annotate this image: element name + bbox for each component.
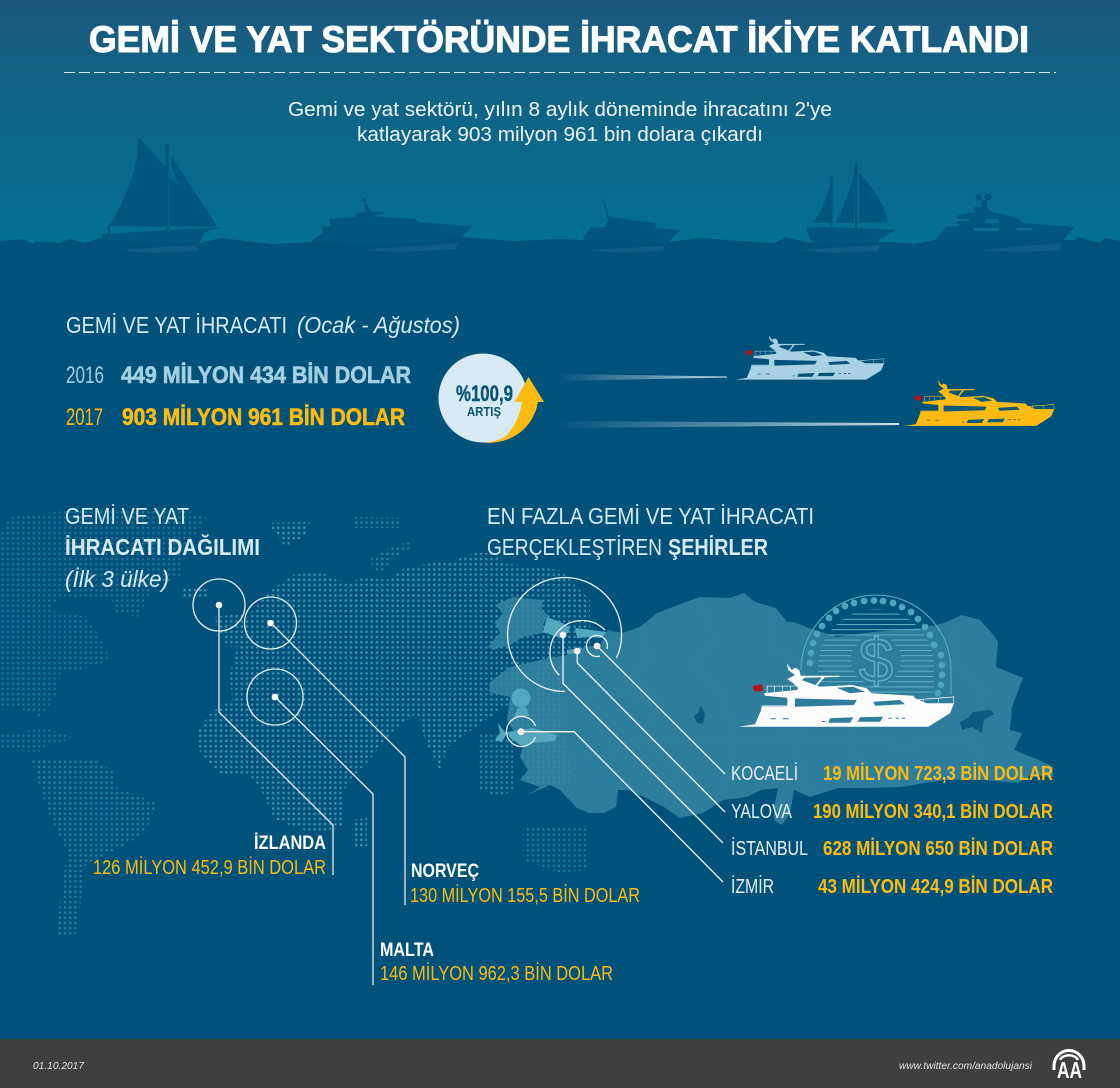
Anatolia (489, 593, 1053, 825)
yacht 2016 (light blue) (735, 335, 884, 380)
Kocaeli: KOCAELİ (731, 762, 798, 785)
dotted overlay on western Turkey (490, 600, 574, 793)
city values list (731, 762, 1053, 898)
2016 value: 2016 (66, 362, 104, 389)
İzmir (731, 875, 1053, 898)
growth badge with arrow (438, 354, 544, 443)
map of Turkey (485, 593, 1053, 825)
label: Norveç: 130 MİLYON 155,5 BİN DOLAR (410, 884, 640, 907)
label: Malta: 146 MİLYON 962,3 BİN DOLAR (380, 962, 613, 985)
speed trail 2017 (559, 421, 899, 428)
2017 value: 903 MİLYON 961 BİN DOLAR (122, 404, 405, 431)
map markers and leader lines: countries (193, 579, 405, 985)
İstanbul: 628 MİLYON 650 BİN DOLAR (823, 837, 1053, 860)
map markers and leader lines: cities (507, 578, 725, 882)
label: Malta (380, 940, 613, 985)
panel: export comparison (66, 312, 1054, 443)
subtitle: Gemi ve yat sektörü, yılın 8 aylık döneminde ihracatını 2'ye (288, 98, 832, 121)
speed trail 2016 (559, 374, 727, 381)
İstanbul (731, 837, 1053, 860)
sailboat four (806, 163, 896, 246)
title: GEMİ VE YAT SEKTÖRÜNDE İHRACAT İKİYE KATLANDI (89, 19, 1029, 60)
label: İzlanda: İZLANDA (254, 833, 326, 854)
label: İzlanda: 126 MİLYON 452,9 BİN DOLAR (93, 856, 326, 879)
heading: country distribution: (İlk 3 ülke) (65, 566, 169, 592)
Kocaeli (731, 762, 1053, 785)
heading: top cities: EN FAZLA GEMİ VE YAT İHRACATI (487, 503, 814, 529)
icon: agency logo: AA (1057, 1057, 1082, 1083)
label: Malta: MALTA (380, 940, 434, 961)
2017 value: 2017 (66, 404, 103, 431)
Kocaeli: 19 MİLYON 723,3 BİN DOLAR (823, 762, 1053, 785)
illustration: fleet silhouettes on the horizon (102, 137, 1074, 248)
heading: top cities (487, 503, 814, 560)
Lake Tuz (694, 705, 705, 724)
panel: sky and horizon (0, 0, 1120, 246)
sea surface with waves (0, 237, 1120, 300)
yacht 2017 (gold) (904, 380, 1054, 426)
ship wakes on the sea (120, 243, 1062, 253)
growth badge with arrow: %100,9 (456, 381, 513, 406)
Yalova: 190 MİLYON 340,1 BİN DOLAR (813, 800, 1053, 823)
icon: dollar coin: $ (859, 627, 893, 696)
highlighted provinces (495, 617, 607, 747)
heading: country distribution: GEMİ VE YAT (65, 503, 189, 529)
heading: country distribution: İHRACATI DAĞILIMI (65, 533, 260, 560)
heading: export period: GEMİ VE YAT İHRACATI (66, 312, 287, 338)
İstanbul: İSTANBUL (731, 837, 808, 860)
heading: top cities: GERÇEKLEŞTİREN (487, 534, 662, 560)
Yalova: YALOVA (731, 801, 793, 823)
Yalova (731, 800, 1053, 823)
2016 value: 449 MİLYON 434 BİN DOLAR (121, 362, 411, 389)
sailboat one (102, 137, 223, 246)
footer bar (0, 1039, 1120, 1088)
icon: dollar coin (801, 595, 951, 700)
motor yacht two (312, 198, 473, 246)
white yacht (738, 663, 954, 727)
footer date: 01.10.2017 (33, 1061, 84, 1072)
heading: export period: (Ocak - Ağustos) (297, 312, 460, 338)
İzmir: 43 MİLYON 424,9 BİN DOLAR (818, 875, 1053, 898)
icon: agency logo (1054, 1050, 1084, 1083)
İzmir: İZMİR (731, 875, 774, 898)
world dot map (0, 510, 590, 937)
label: Norveç: NORVEÇ (411, 861, 479, 882)
label: İzlanda (93, 833, 326, 879)
heading: export period (66, 312, 460, 338)
label: Norveç (410, 861, 640, 907)
Thrace (488, 597, 548, 650)
motor yacht three (583, 199, 680, 245)
heading: top cities: ŞEHİRLER (668, 534, 768, 560)
subtitle: katlayarak 903 milyon 961 bin dolara çıkardı (357, 123, 763, 146)
Lake Van (960, 710, 994, 733)
superyacht five (936, 194, 1074, 248)
growth badge with arrow: ARTIŞ (467, 404, 501, 419)
footer social link: www.twitter.com/anadolujansi (899, 1061, 1033, 1072)
province borders (560, 597, 985, 807)
heading: country distribution (65, 503, 260, 592)
subtitle (288, 98, 832, 146)
